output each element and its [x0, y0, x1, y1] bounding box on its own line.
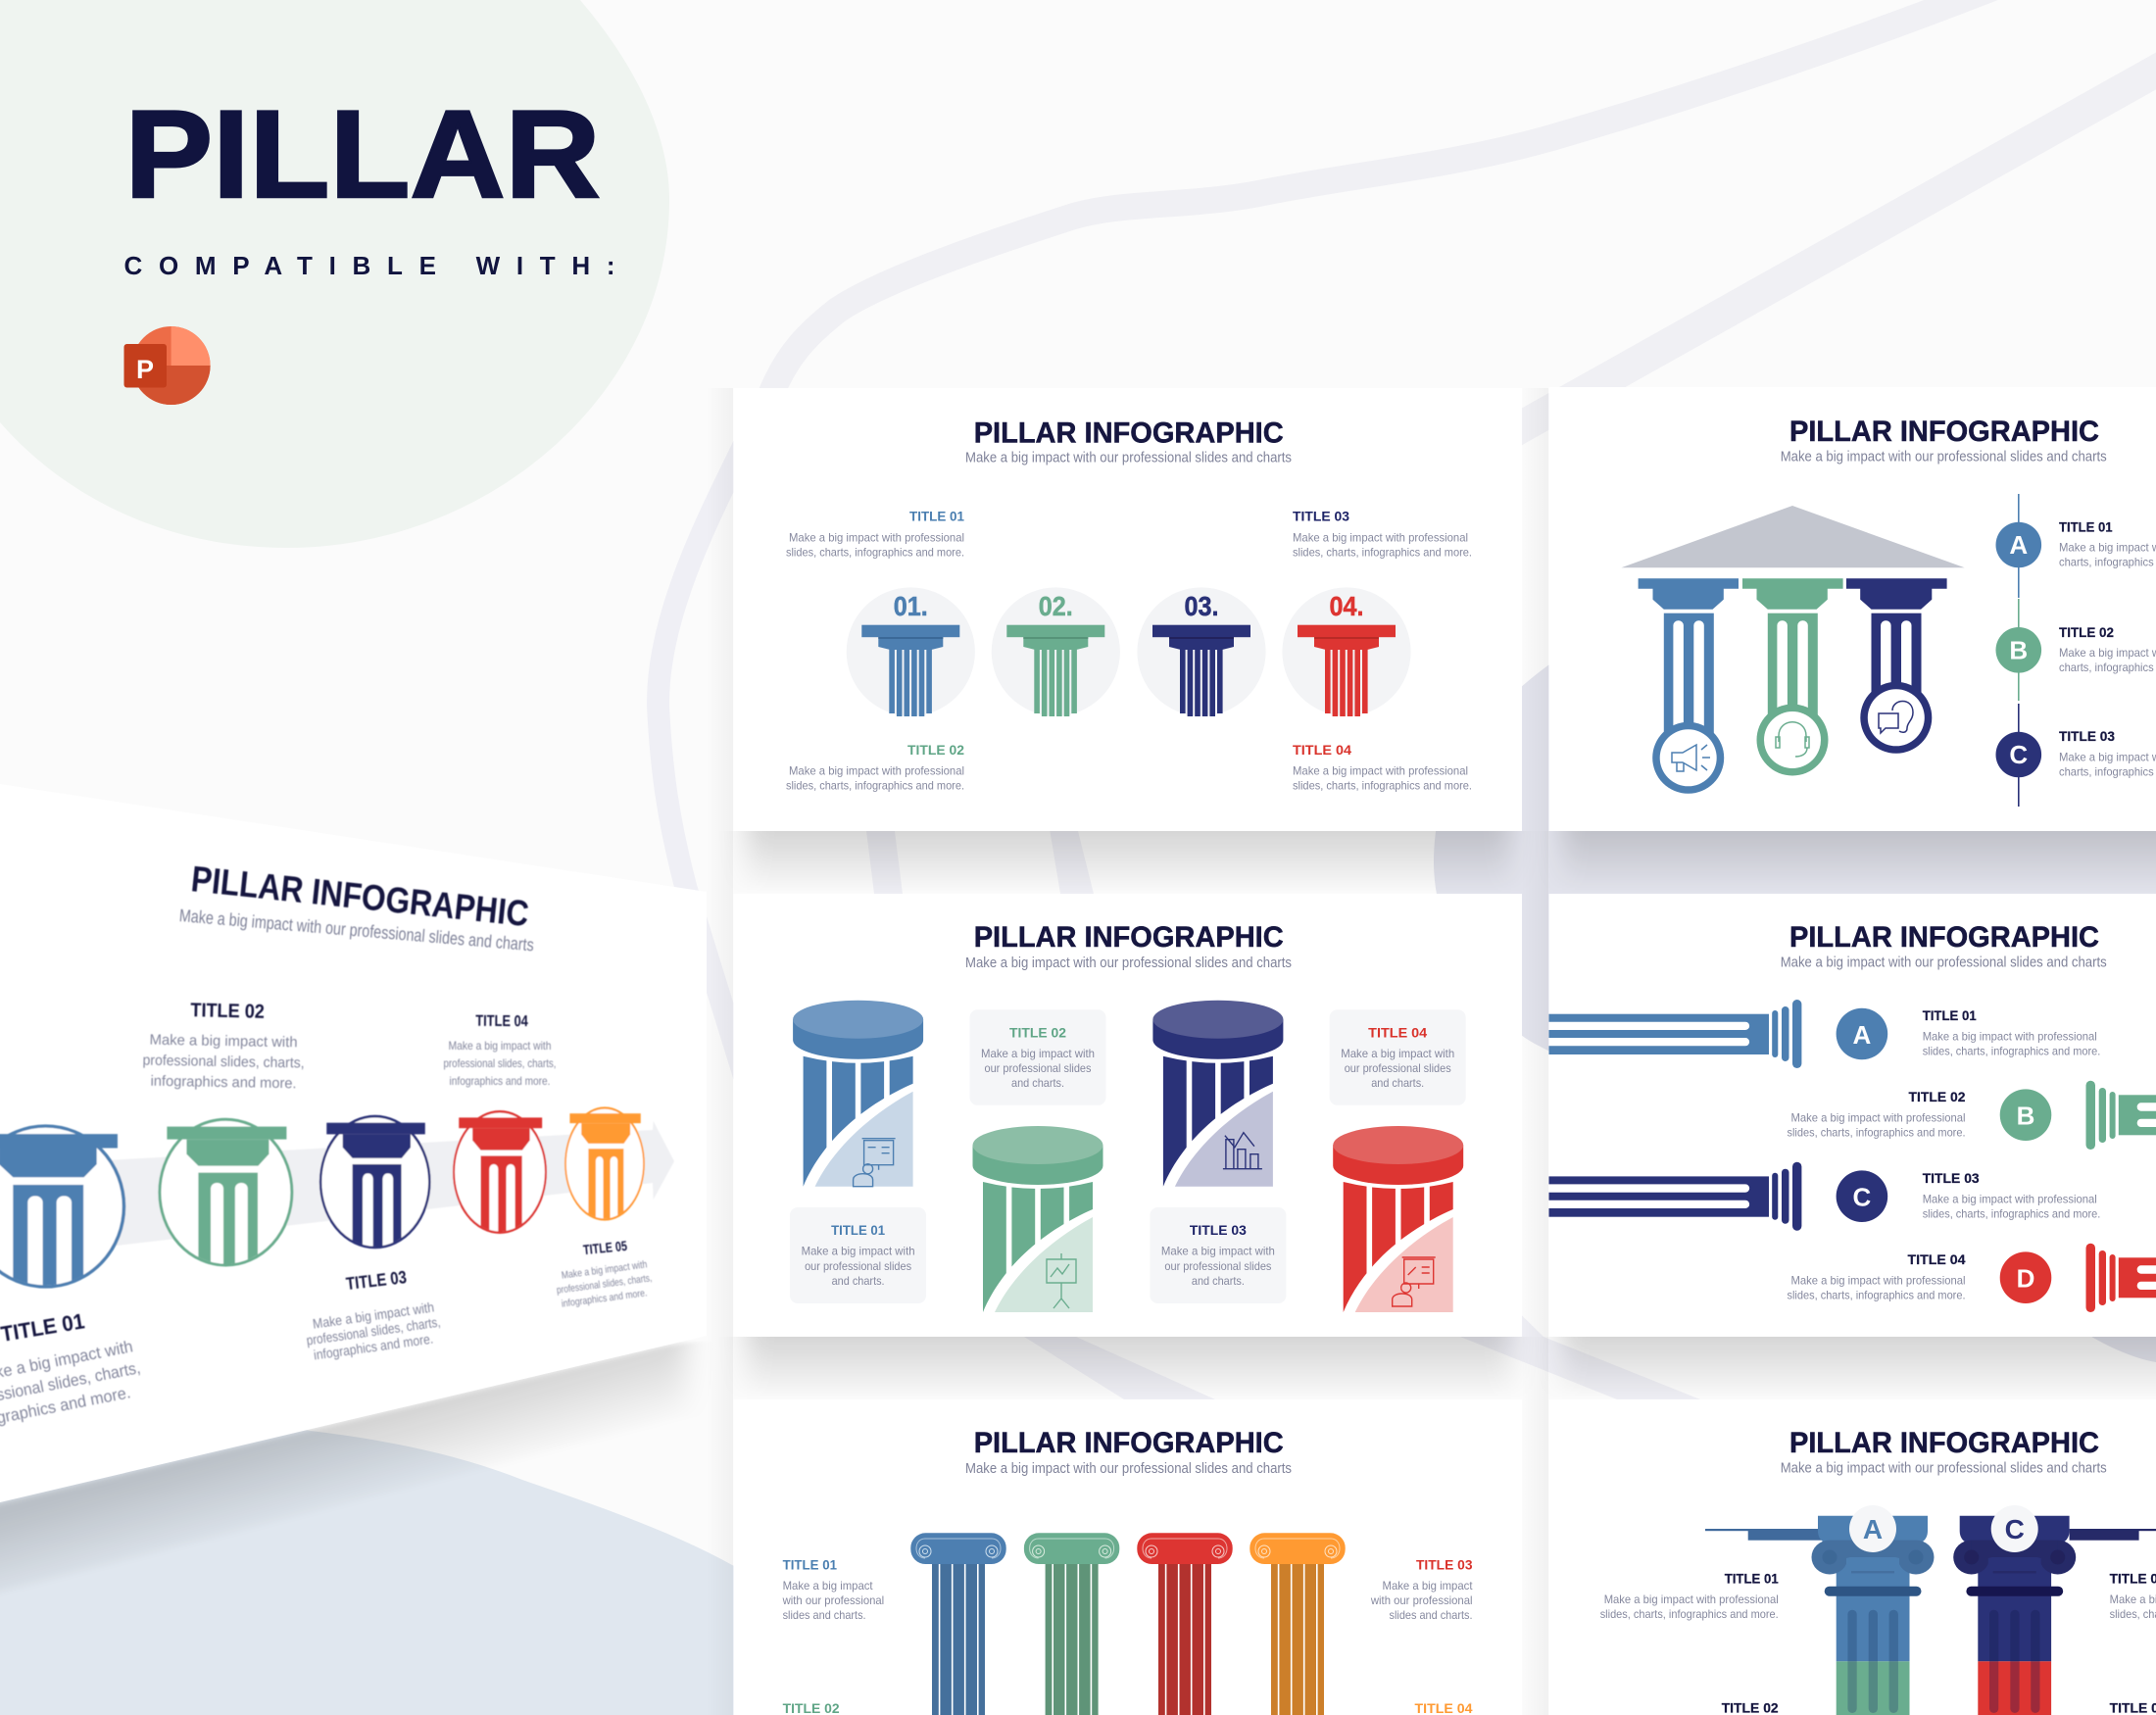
text block: title 01: Make a big impact: [783, 1579, 873, 1592]
text block: title 03: Make a big impact with professional: [1923, 1193, 2097, 1206]
text block: tilted title 05: Make a big impact with: [561, 1258, 648, 1282]
text block: tilted title 03: infographics and more.: [313, 1331, 434, 1363]
pillar icon 5: [565, 1108, 644, 1224]
text block: title 02: Make a big impact with professional: [789, 764, 964, 778]
slide 4 contents: [1548, 921, 2156, 1312]
text block: tilted title 05: infographics and more.: [561, 1287, 648, 1310]
info box title 01: and charts.: [832, 1274, 885, 1288]
panel: tilted slide with five pillar timeline: [0, 865, 707, 1502]
badge B: B: [2017, 1102, 2034, 1131]
text block: title 02: [786, 742, 964, 793]
text block: title 01: TITLE 01: [2059, 518, 2113, 534]
pillar 02: [992, 587, 1120, 716]
slide 1 contents: [786, 417, 1472, 793]
cylinder pillar 3: [1152, 1001, 1283, 1187]
badge A: [1837, 1008, 1887, 1059]
panel: slide 2 temple pillars: [1548, 387, 2156, 831]
text block: title 01: [786, 509, 964, 559]
info box title 02: [970, 1009, 1105, 1105]
text block: title 01: Make a big impact with professional: [1604, 1592, 1779, 1606]
text block: title 02: slides, charts, infographics and more.: [1788, 1125, 1966, 1139]
text block: tilted title 02: TITLE 02: [190, 1000, 265, 1023]
icon: PowerPoint logo: [123, 326, 211, 405]
text block: title 03: [1923, 1170, 2100, 1221]
text block: title 03: slides, charts, infographics and more.: [1293, 545, 1472, 559]
roof triangle: [1621, 506, 1965, 567]
info box title 02: Make a big impact with: [981, 1047, 1095, 1060]
slide 6 contents: [1600, 1427, 2156, 1715]
text block: title 03: [1293, 509, 1472, 559]
column C: C: [2005, 1514, 2025, 1544]
panel: slide 6 capitals with letters: [1548, 1399, 2156, 1715]
green hanging pillar with headset: [1742, 578, 1843, 776]
pillar 03: 03.: [1184, 591, 1219, 621]
text block: title 01: TITLE 01: [1725, 1571, 1779, 1587]
info box title 04: Make a big impact with: [1341, 1047, 1454, 1060]
slide 4 subtitle: Make a big impact with our professional slides and charts: [1781, 955, 2107, 971]
pillar 03: [1137, 587, 1266, 716]
text block: title 04: [1788, 1251, 1966, 1302]
text block: title 04: slides, charts, infographics and more.: [1293, 779, 1472, 793]
text block: title 03: Make a big impact: [1382, 1579, 1473, 1592]
info box title 03: our professional slides: [1164, 1259, 1271, 1273]
pillar 02: 02.: [1039, 591, 1073, 621]
slide 3 title: PILLAR INFOGRAPHIC: [974, 921, 1284, 954]
text block: tilted title 02: Make a big impact with: [149, 1032, 298, 1051]
blue hanging pillar with megaphone: [1639, 578, 1739, 794]
pillar 01: 01.: [894, 591, 928, 621]
info box title 03: [1150, 1207, 1286, 1303]
info box title 04: TITLE 04: [1368, 1024, 1427, 1040]
info box title 01: our professional slides: [805, 1259, 911, 1273]
badge B: [1995, 627, 2041, 673]
ionic column orange: [1250, 1533, 1346, 1715]
text block: title 04: slides, charts, infographics and more.: [1788, 1289, 1966, 1302]
icon: bar chart: [1223, 1133, 1262, 1169]
text block: tilted title 01: TITLE 01: [0, 1308, 86, 1347]
text block: title 01: Make a big impact with professional: [789, 530, 964, 544]
icon: chart board: [1047, 1253, 1076, 1308]
slide 2 title: PILLAR INFOGRAPHIC: [1789, 416, 2099, 448]
badge B: B: [2009, 635, 2028, 664]
text block: title 01: slides, charts, infographics and more.: [1600, 1607, 1779, 1621]
navy hanging pillar with chat and ear: [1846, 578, 1947, 754]
tilted slide contents: [0, 858, 674, 1432]
slide 5 subtitle: Make a big impact with our professional slides and charts: [965, 1460, 1292, 1477]
pillar 04: [1282, 587, 1411, 716]
text block: title 03: TITLE 03: [1293, 509, 1349, 524]
bottom-left blue shape: [0, 1372, 734, 1715]
text block: title 04: TITLE 04: [1293, 742, 1351, 758]
tilted slide title: PILLAR INFOGRAPHIC: [189, 858, 531, 934]
ionic column blue: [910, 1533, 1006, 1715]
text block: title 03: TITLE 03: [1923, 1170, 1980, 1186]
horizontal pillar C: [1548, 1162, 1801, 1231]
text block: tilted title 04: [443, 1013, 557, 1088]
background circle: [0, 0, 669, 548]
badge C: [1995, 732, 2041, 777]
info box title 03: TITLE 03: [1190, 1222, 1247, 1238]
badge D: [2000, 1251, 2051, 1303]
panel: slide 4 horizontal pillars: [1548, 894, 2156, 1337]
info box title 02: and charts.: [1011, 1076, 1064, 1090]
text block: tilted title 02: professional slides, charts,: [142, 1053, 305, 1071]
icon: PowerPoint logo: P: [136, 355, 154, 384]
badge A: A: [2009, 530, 2028, 560]
cylinder pillar 2: [972, 1126, 1103, 1312]
text block: title 02: [1788, 1089, 1966, 1139]
text block: title 02: [2059, 624, 2156, 674]
horizontal pillar D: [2085, 1244, 2156, 1312]
pillar 01: [847, 587, 975, 716]
ionic column green: [1024, 1533, 1119, 1715]
text block: tilted title 03: professional slides, charts,: [306, 1314, 441, 1348]
text block: title 03: with our professional: [1370, 1593, 1472, 1607]
text block: title 04: TITLE 04: [1907, 1251, 1966, 1267]
text block: title 01: TITLE 01: [783, 1556, 837, 1572]
icon: chat and ear: [1879, 702, 1913, 733]
column A: [1705, 1505, 1935, 1715]
text block: tilted title 03: [306, 1267, 441, 1363]
text block: title 03: [1370, 1556, 1473, 1622]
pillar icon 3: [320, 1116, 429, 1252]
text block: tilted title 01: [0, 1308, 142, 1432]
info box title 03: and charts.: [1192, 1274, 1245, 1288]
slide 1 title: PILLAR INFOGRAPHIC: [974, 417, 1284, 449]
slide 3 subtitle: Make a big impact with our professional slides and charts: [965, 955, 1292, 971]
text block: title 04: [1293, 742, 1472, 793]
pillar icon 4: [454, 1111, 546, 1238]
text block: tilted title 04: TITLE 04: [475, 1013, 528, 1030]
badge A: A: [1853, 1020, 1872, 1050]
slide 4 title: PILLAR INFOGRAPHIC: [1789, 921, 2099, 954]
slide 5 contents: [782, 1427, 1473, 1715]
text block: title 03: TITLE 03: [1416, 1556, 1473, 1572]
info box title 04: [1330, 1009, 1466, 1105]
text block: tilted title 02: [142, 1000, 305, 1092]
subheading: compatible with: COMPATIBLE WITH:: [123, 251, 615, 280]
cylinder pillar 1: [793, 1001, 923, 1187]
info box title 04: and charts.: [1371, 1076, 1424, 1090]
icon: megaphone: [1672, 745, 1710, 771]
text block: tilted title 02: infographics and more.: [150, 1073, 297, 1092]
text block: title 02: Make a big impact with professional: [1791, 1110, 1966, 1124]
text block: tilted title 05: TITLE 05: [582, 1238, 628, 1257]
text block: tilted title 04: professional slides, charts,: [443, 1056, 557, 1070]
text block: tilted title 03: Make a big impact with: [312, 1298, 435, 1332]
label: title 02: TITLE 02: [1722, 1699, 1779, 1715]
text block: title 02: TITLE 02: [2059, 624, 2114, 640]
info box title 04: our professional slides: [1345, 1061, 1451, 1075]
badge C: C: [2009, 740, 2028, 769]
badge B: [2000, 1089, 2051, 1141]
info box title 01: TITLE 01: [831, 1222, 885, 1238]
info box title 01: [790, 1207, 926, 1303]
text block: title 01: [1600, 1571, 1779, 1621]
cylinder pillar 4: [1333, 1126, 1463, 1312]
text block: title 01: [782, 1556, 884, 1622]
pillar 04: 04.: [1329, 591, 1364, 621]
panel: slide 3 cylinder pillars: [733, 894, 1522, 1337]
text block: title 03: slides, charts, infographics and more.: [1923, 1207, 2100, 1221]
pillar icon 1: [0, 1126, 123, 1294]
text block: title 04: Make a big impact with professional: [1293, 764, 1468, 778]
horizontal pillar B: [2085, 1081, 2156, 1150]
arrow band: [0, 1121, 674, 1259]
heading: PILLAR: PILLAR: [125, 84, 600, 223]
slide 1 subtitle: Make a big impact with our professional slides and charts: [965, 450, 1292, 466]
icon: presenter: [1393, 1257, 1436, 1306]
info box title 02: TITLE 02: [1009, 1024, 1066, 1040]
badge A: [1995, 522, 2041, 567]
slide 3 contents: [790, 921, 1466, 1312]
text block: title 03: [2059, 728, 2156, 779]
text block: title 04: Make a big impact with professional: [1791, 1274, 1966, 1288]
slide 2 subtitle: Make a big impact with our professional slides and charts: [1781, 448, 2107, 465]
text block: title 02: TITLE 02: [1909, 1089, 1966, 1104]
column C: [1953, 1505, 2156, 1715]
text block: title 03: Make a big impact with professional: [1293, 530, 1468, 544]
pillar icon 2: [160, 1119, 292, 1271]
icon: presenter: [854, 1139, 896, 1187]
badge C: [1837, 1170, 1887, 1222]
text block: title 03: slides and charts.: [1390, 1608, 1472, 1622]
slide 5 title: PILLAR INFOGRAPHIC: [974, 1427, 1284, 1459]
panel: slide 5 ionic columns: [733, 1399, 1522, 1715]
info box title 01: Make a big impact with: [802, 1245, 915, 1258]
text block: title 01: [1923, 1007, 2100, 1057]
info box title 03: Make a big impact with: [1161, 1245, 1275, 1258]
slide 2 contents: [1621, 416, 2156, 807]
text block: title 01: [2059, 518, 2156, 569]
text block: title 01: with our professional: [782, 1593, 884, 1607]
text block: tilted title 05: professional slides, charts,: [556, 1272, 653, 1297]
ionic column red: [1137, 1533, 1233, 1715]
text block: tilted title 05: [556, 1238, 653, 1310]
text block: tilted title 04: Make a big impact with: [449, 1039, 551, 1053]
horizontal pillar A: [1548, 1000, 1801, 1068]
text block: title 02: TITLE 02: [907, 742, 964, 758]
text block: title 01: slides, charts, infographics and more.: [786, 545, 964, 559]
text block: tilted title 04: infographics and more.: [449, 1074, 551, 1088]
text block: title 01: slides and charts.: [783, 1608, 866, 1622]
timeline line: [2018, 494, 2020, 807]
text block: tilted title 03: TITLE 03: [345, 1267, 408, 1294]
text block: title 01: TITLE 01: [1923, 1007, 1977, 1023]
text block: title 01: slides, charts, infographics and more.: [1923, 1044, 2100, 1057]
text block: title 01: TITLE 01: [909, 509, 964, 524]
panel: slide 1 numbered pillars: [733, 388, 1522, 831]
badge C: C: [1853, 1183, 1872, 1212]
text block: title 03: TITLE 03: [2059, 728, 2115, 744]
text block: title 03: [2110, 1571, 2156, 1621]
slide 6 title: PILLAR INFOGRAPHIC: [1789, 1427, 2099, 1459]
info box title 02: our professional slides: [984, 1061, 1092, 1075]
text block: title 02: slides, charts, infographics and more.: [786, 779, 964, 793]
icon: headset: [1776, 722, 1809, 757]
tilted slide subtitle: Make a big impact with our professional slides and charts: [178, 906, 535, 955]
column A: A: [1863, 1514, 1883, 1544]
badge D: D: [2017, 1264, 2034, 1294]
slide 6 subtitle: Make a big impact with our professional slides and charts: [1781, 1460, 2107, 1477]
text block: title 01: Make a big impact with professional: [1923, 1029, 2097, 1043]
